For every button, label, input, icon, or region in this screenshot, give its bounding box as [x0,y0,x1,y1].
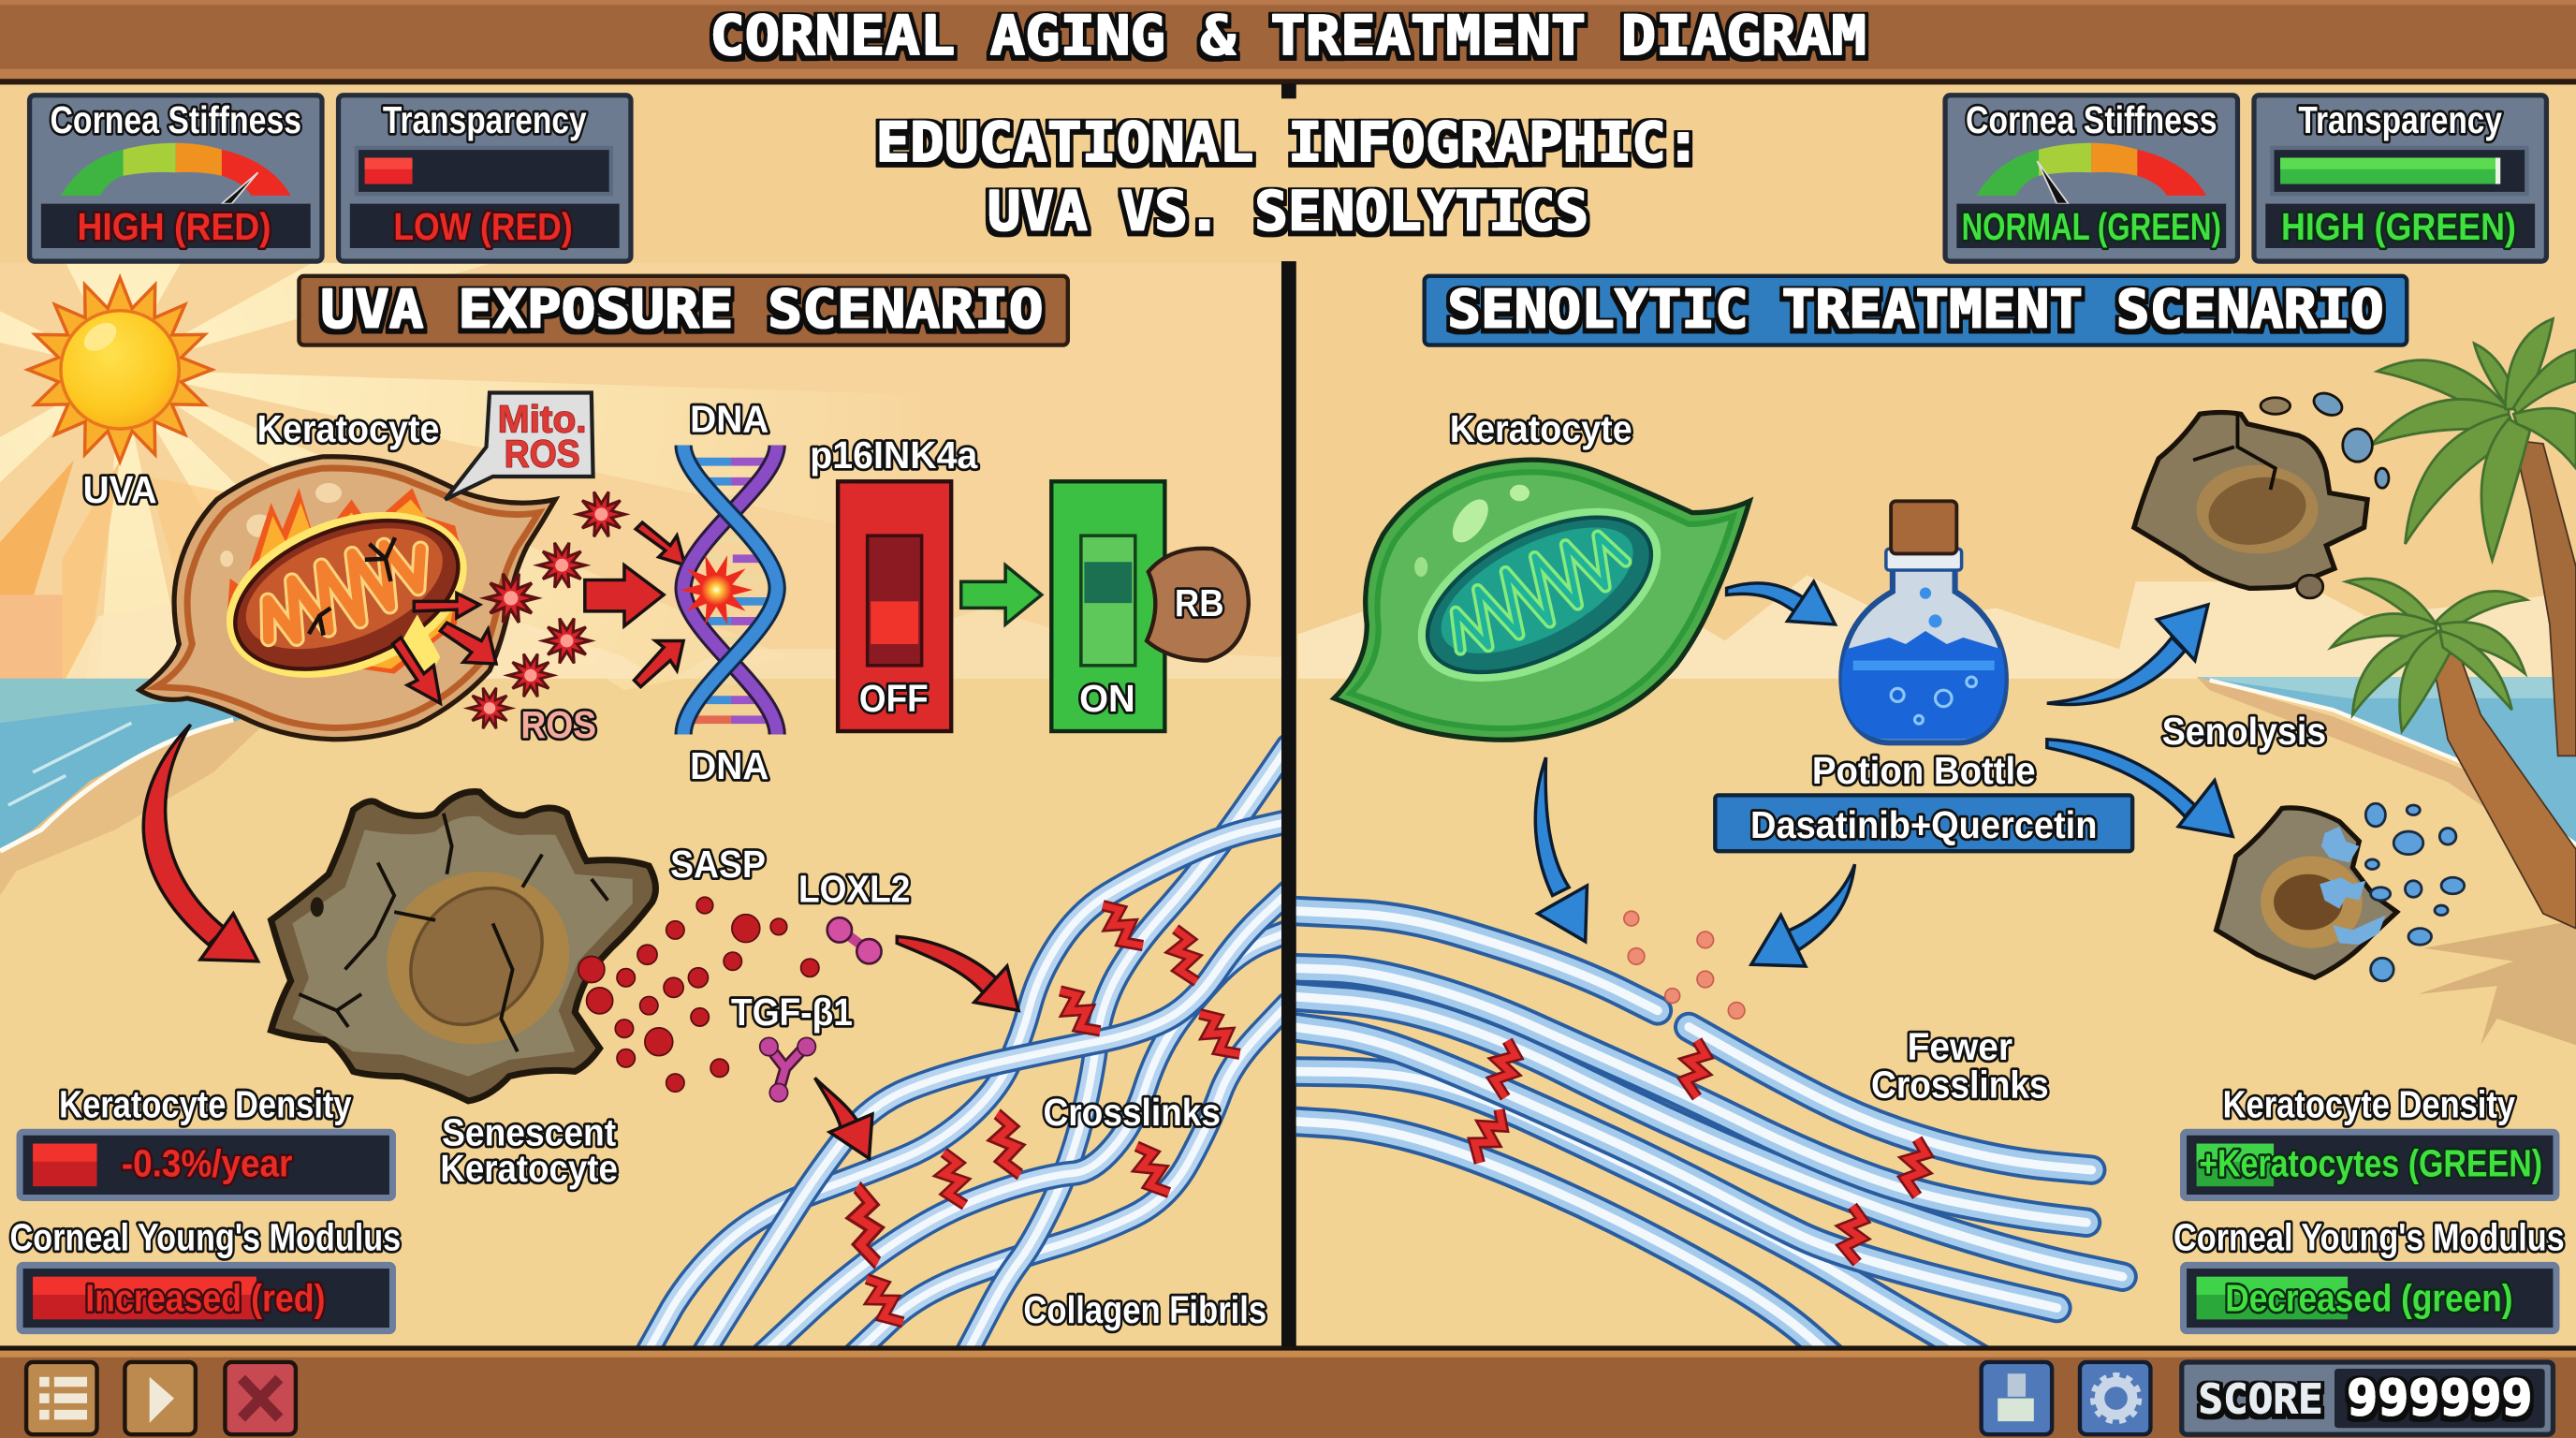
icon: LOXL2 molecule [827,917,882,963]
stat: young's modulus (left): Corneal Young's Modulus [10,1216,401,1259]
senescent keratocyte [271,792,655,1101]
label box: Dasatinib+Quercetin: Dasatinib+Quercetin [1750,803,2097,846]
collagen fibrils (left) [640,746,1288,1364]
stat: keratocyte density (left) [20,1082,392,1197]
label: p16INK4a: p16INK4a [810,433,978,477]
stat: young's modulus (left) [10,1216,401,1331]
fragments [2365,803,2465,981]
label: potion bottle: Potion Bottle [1812,749,2036,792]
button: close [225,1362,296,1434]
HUD: cornea stiffness (left): Cornea Stiffness [51,98,301,141]
label: fewer crosslinks [1871,1025,2049,1106]
stat: keratocyte density (right) [2184,1082,2556,1197]
top title bar [0,0,2576,84]
label: keratocyte (left): Keratocyte [257,407,439,450]
arrow: green [961,565,1042,624]
HUD: cornea stiffness (left): HIGH (RED) [77,205,271,248]
HUD: transparency (right) [2254,95,2546,261]
bottom bar [0,1345,2576,1438]
label: senescent keratocyte: Keratocyte [440,1147,618,1190]
HUD: cornea stiffness (right): Cornea Stiffness [1966,98,2217,141]
gauge [61,143,291,204]
right panel dunes [1298,575,2576,679]
subtitle [875,110,1701,243]
crosslinks (right) [1467,1040,1928,1263]
callout: Mito. ROS: ROS [505,432,580,475]
label: fewer crosslinks: Fewer [1908,1025,2012,1068]
label: keratocyte (right): Keratocyte [1450,407,1632,450]
HUD: cornea stiffness (right): NORMAL (GREEN) [1962,205,2221,248]
left sea [0,679,283,896]
stat: keratocyte density (right): Keratocyte Density [2223,1082,2516,1125]
arrow: TGF to collagen [815,1078,872,1158]
title: CORNEAL AGING & TREATMENT DIAGRAM [710,4,1866,67]
arrow: keratocyte to collagen [1535,757,1587,942]
arrow: keratocyte to potion [1727,581,1835,624]
fragments [2261,389,2389,598]
switch ON: ON [1079,677,1135,720]
icon: TGF-β1 molecule [760,1037,815,1102]
SASP particles [578,897,819,1092]
crosslinks (left) [852,899,1241,1329]
RB protein [1147,549,1249,661]
stat: young's modulus (right): Decreased (green) [2225,1277,2512,1320]
stat: young's modulus (left): Increased (red) [85,1277,326,1320]
HUD: transparency (left): LOW (RED) [393,205,573,248]
subtitle: EDUCATIONAL INFOGRAPHIC: [875,110,1701,174]
ROS arrows [392,522,685,703]
small palm tree [2331,579,2576,929]
label: SASP: SASP [670,843,766,886]
HUD: transparency (left): Transparency [383,98,587,141]
banner: senolytic treatment scenario: SENOLYTIC TREATMENT SCENARIO [1447,279,2384,340]
HUD: transparency (right): Transparency [2298,98,2502,141]
mitochondrion [214,492,479,698]
stat: keratocyte density (left): Keratocyte Density [59,1082,352,1125]
label: RB: RB [1175,581,1224,624]
arrow: to DNA [585,565,664,626]
flames [203,481,490,709]
switch OFF [838,481,951,731]
gauge [1976,143,2206,204]
HUD: transparency (right): HIGH (GREEN) [2281,205,2516,248]
callout: Mito. ROS [446,392,593,500]
collagen fibrils (right) [1281,910,2123,1364]
switch OFF: OFF [859,677,929,720]
label: senescent keratocyte [440,1110,618,1190]
label: fewer crosslinks: Crosslinks [1871,1063,2049,1106]
healthy keratocyte [1334,460,1749,740]
label: UVA: UVA [83,468,157,511]
arrow: potion to senescent cell [2047,605,2208,705]
HUD: transparency (left) [339,95,631,261]
label: senescent keratocyte: Senescent [442,1110,616,1153]
label: crosslinks: Crosslinks [1043,1091,1221,1134]
HUD: cornea stiffness (right) [1945,95,2237,261]
button: settings [2080,1362,2150,1434]
label: LOXL2: LOXL2 [798,868,910,911]
stat: young's modulus (right) [2174,1216,2565,1331]
right sea [2197,677,2576,871]
centre divider [1281,84,1296,1349]
switch ON [1051,481,1164,731]
DNA helix [680,446,777,735]
label: DNA bottom: DNA [690,744,768,787]
dissolving senescent cell [2217,803,2465,981]
subtitle: UVA VS. SENOLYTICS [988,180,1588,243]
arrow: potion to collagen [1751,864,1855,966]
button: menu [26,1362,97,1434]
DNA damage burst [680,555,753,624]
button: play [124,1362,196,1434]
score panel: SCORE [2198,1375,2323,1423]
arrow: LOXL2 to collagen [897,936,1018,1010]
mitochondrion [1390,472,1689,717]
label: TGF-β1: TGF-β1 [731,990,853,1034]
stat: keratocyte density (left): -0.3%/year [122,1142,293,1185]
icon: sun [28,278,212,462]
senolytic particles [1624,911,1745,1019]
label: DNA top: DNA [690,398,768,441]
arrow: potion to senolysis [2047,740,2232,836]
left panel sun rays [0,263,1281,690]
palm shadow [2419,920,2576,1045]
senescent cell breaking apart [2134,389,2389,598]
callout: Mito. ROS: Mito. [498,398,587,441]
score panel: 999999 [2347,1370,2532,1427]
banner: UVA exposure scenario: UVA EXPOSURE SCENARIO [320,279,1043,340]
score panel [2182,1362,2553,1434]
arrow: keratocyte to senescent [143,725,258,961]
keratocyte with damaged mitochondrion [139,457,555,740]
HUD: cornea stiffness (left) [30,95,322,261]
ROS particles [468,492,624,728]
label: collagen fibrils: Collagen Fibrils [1023,1288,1266,1331]
label: ROS: ROS [520,703,596,746]
label box: Dasatinib+Quercetin [1715,795,2132,851]
label: senolysis: Senolysis [2162,710,2326,753]
potion bottle [1841,501,2006,742]
big palm tree [2371,318,2576,756]
button: save [1982,1362,2052,1434]
